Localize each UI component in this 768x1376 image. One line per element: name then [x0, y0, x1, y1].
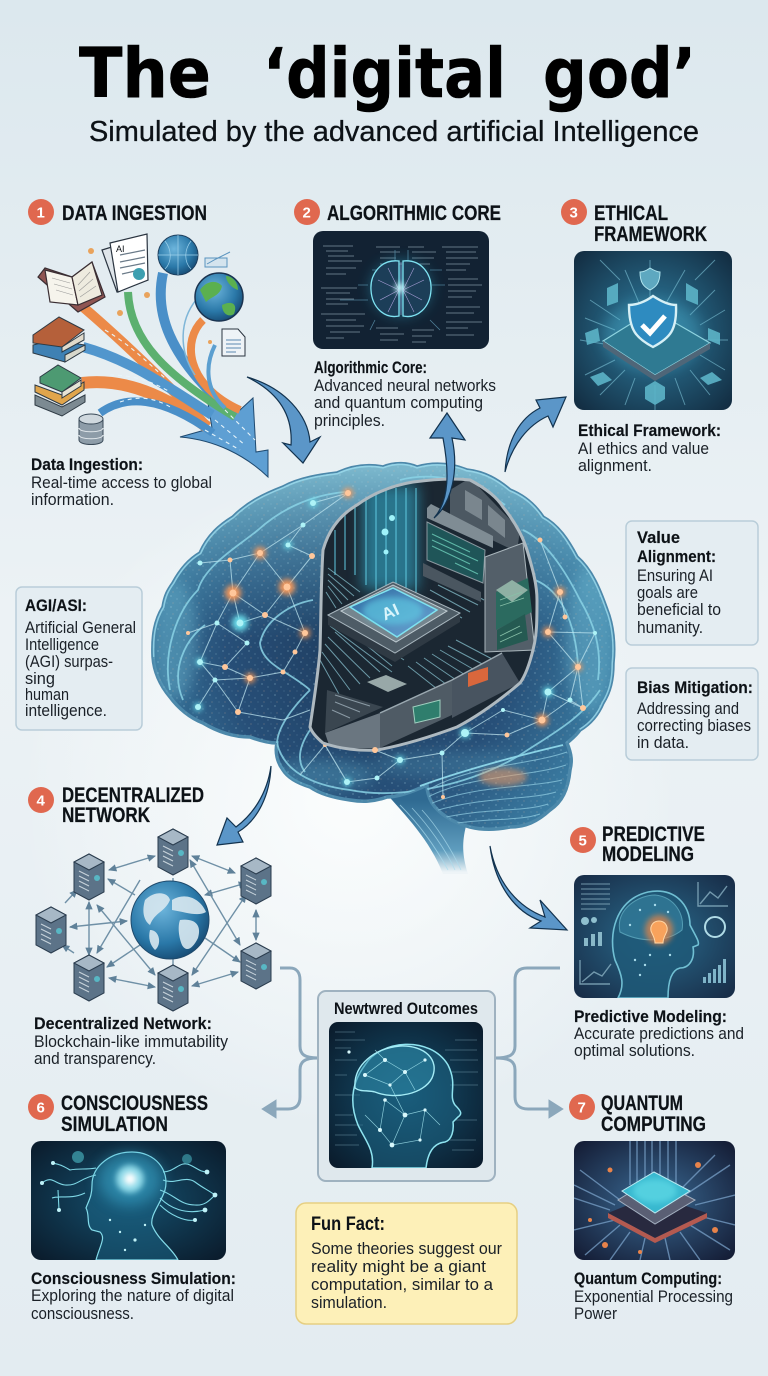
description 1 [31, 455, 212, 509]
callout: fun fact: simulation. [311, 1293, 387, 1312]
panel: AGI/ASI: Intelligence [25, 635, 99, 654]
badge 1: 1 [36, 204, 45, 222]
section 1: data ingestion [28, 199, 268, 509]
section 7: quantum computing [569, 1092, 735, 1323]
neural links [188, 493, 595, 797]
network links [62, 856, 256, 987]
description 4 [34, 1014, 229, 1068]
globe earth [195, 273, 243, 321]
thumbnail: neural code brain [313, 231, 489, 349]
neural nodes glow [225, 488, 582, 726]
description 3: Ethical Framework: [578, 421, 721, 440]
server [241, 858, 271, 904]
heading 3: FRAMEWORK [594, 223, 707, 246]
server [158, 965, 188, 1011]
badge 7 [569, 1094, 595, 1120]
description 6: consciousness. [31, 1304, 134, 1323]
thumbnail: predictive head [574, 875, 735, 998]
AI paper [102, 234, 148, 292]
section 4: decentralized network [28, 784, 271, 1068]
description 7: Quantum Computing: [574, 1269, 722, 1288]
merged arrow [180, 385, 268, 477]
brain outline [153, 464, 614, 829]
badge 4 [28, 787, 54, 813]
heading 5: MODELING [602, 843, 694, 866]
description 5: Predictive Modeling: [574, 1007, 727, 1026]
section 2: algorithmic core [294, 199, 501, 430]
heading 4: NETWORK [62, 804, 150, 827]
panel: AGI/ASI: AGI/ASI: [25, 596, 87, 615]
section 5: predictive modeling [570, 823, 744, 1060]
server [241, 943, 271, 989]
brain upper glow and folds [150, 460, 620, 830]
callout: fun fact [296, 1203, 517, 1324]
server [74, 854, 104, 900]
description 3: alignment. [578, 456, 652, 475]
description 5: optimal solutions. [574, 1041, 695, 1060]
cutaway rim [310, 479, 537, 750]
description 7: Exponential Processing [574, 1287, 733, 1306]
panel: AGI/ASI [16, 587, 142, 730]
brainstem [385, 785, 468, 874]
badge 3: 3 [570, 204, 578, 222]
badge 6: 6 [36, 1100, 45, 1116]
description 7: Power [574, 1304, 617, 1323]
panel: bias mitigation: correcting biases [637, 716, 751, 735]
neural nodes [186, 490, 586, 799]
description 7 [574, 1269, 733, 1323]
circuit traces [320, 568, 494, 696]
callout: fun fact: Some theories suggest our [311, 1239, 502, 1258]
server [158, 829, 188, 875]
panel: value alignment: Ensuring AI [637, 566, 713, 585]
globe blue [158, 235, 198, 275]
badge 5: 5 [578, 832, 587, 850]
arrow: brain to network [217, 766, 271, 845]
panel: value alignment: humanity. [637, 618, 703, 637]
heading 3: ETHICAL [594, 202, 668, 225]
badge 2 [294, 199, 320, 225]
small particles [88, 248, 212, 344]
heading 6: CONSCIOUSNESS [61, 1092, 208, 1115]
callout: fun fact: computation, similar to a [311, 1275, 494, 1294]
title: The [79, 34, 211, 114]
panel: value alignment: Value [637, 528, 680, 547]
title: ‘digital [263, 34, 506, 114]
AI paper: AI [116, 244, 125, 254]
panel: value alignment [626, 521, 758, 645]
panel: AGI/ASI: sing [25, 669, 55, 688]
description 3 [578, 421, 721, 475]
description 6: Consciousness Simulation: [31, 1269, 236, 1288]
description 2 [314, 358, 496, 430]
section 3: ethical framework [561, 199, 732, 475]
badge 3 [561, 199, 587, 225]
server [36, 907, 66, 953]
description 5 [574, 1007, 744, 1060]
document [222, 329, 245, 356]
description 6 [31, 1269, 236, 1323]
thumbnail: shield on chip [574, 251, 732, 410]
subtitle: Simulated by the advanced artificial Intelligence [89, 116, 699, 148]
arrow: data to brain [247, 377, 320, 463]
description 5: Accurate predictions and [574, 1024, 744, 1043]
heading 7: COMPUTING [601, 1113, 706, 1136]
panel: AGI/ASI: human [25, 685, 69, 704]
heading 7 [601, 1092, 706, 1136]
globe [131, 881, 209, 959]
badge 2: 2 [302, 204, 311, 222]
panel: AGI/ASI: (AGI) surpas- [25, 652, 113, 671]
panel: value alignment: goals are [637, 583, 698, 602]
heading 1: DATA INGESTION [62, 202, 207, 225]
description 4: Decentralized Network: [34, 1014, 212, 1033]
description 1: information. [31, 490, 114, 509]
panel: value alignment: beneficial to [637, 600, 721, 619]
panel: AGI/ASI: Artificial General [25, 618, 136, 637]
heading 2: ALGORITHMIC CORE [327, 202, 501, 225]
server [74, 955, 104, 1001]
panel: bias mitigation [626, 668, 758, 760]
description 1: Data Ingestion: [31, 455, 143, 474]
data beam [362, 485, 418, 590]
lower panels [325, 690, 383, 733]
thumbnail: quantum chip [574, 1141, 735, 1260]
heading 5: PREDICTIVE [602, 823, 705, 846]
brain illustration [150, 460, 620, 874]
description 4: Blockchain-like immutability [34, 1032, 229, 1051]
connectors around central panel [264, 968, 561, 1116]
description 1: Real-time access to global [31, 473, 212, 492]
thumbnail: glowing head [329, 1022, 483, 1168]
data streams [82, 273, 255, 450]
heading 3 [594, 202, 707, 246]
cutaway chamber [310, 478, 537, 750]
cerebellum stripes [428, 752, 567, 824]
heading 4: DECENTRALIZED [62, 784, 204, 807]
arrow: brain to ethics [505, 397, 566, 472]
panel: bias mitigation: Addressing and [637, 699, 739, 718]
description 2: and quantum computing [314, 393, 483, 412]
badge 4: 4 [36, 792, 46, 810]
description 2: Advanced neural networks [314, 376, 496, 395]
arrow: brain to predictive [490, 846, 567, 930]
arrow: brain to algorithmic core [430, 413, 465, 518]
panel: bias mitigation: Bias Mitigation: [637, 678, 753, 697]
title [79, 34, 696, 114]
description 6: Exploring the nature of digital [31, 1286, 234, 1305]
shield [629, 296, 676, 347]
callout: fun fact: reality might be a giant [311, 1257, 486, 1276]
description 2: principles. [314, 411, 385, 430]
mini chart [205, 252, 230, 267]
description 2: Algorithmic Core: [314, 358, 427, 377]
green book stack [35, 365, 85, 416]
badge 5 [570, 827, 596, 853]
database [79, 414, 103, 444]
description 4: and transparency. [34, 1049, 156, 1068]
red book stack [33, 317, 85, 362]
section 6: consciousness simulation [28, 1092, 236, 1323]
chip [328, 614, 460, 662]
open book [38, 262, 105, 312]
heading 4 [62, 784, 204, 827]
heading 6: SIMULATION [61, 1113, 168, 1136]
badge 7: 7 [578, 1100, 586, 1116]
callout: fun fact: Fun Fact: [311, 1214, 385, 1235]
panel: value alignment: Alignment: [637, 547, 716, 566]
panel: bias mitigation: in data. [637, 733, 689, 752]
badge 6 [28, 1094, 54, 1120]
panel heading: Newtwred Outcomes [334, 999, 478, 1018]
panel: AGI/ASI: intelligence. [25, 701, 107, 720]
server racks [450, 481, 520, 548]
title: god’ [543, 34, 696, 114]
thumbnail: glowing mind [31, 1141, 226, 1260]
chip label: AI [379, 600, 402, 624]
description 3: AI ethics and value [578, 439, 709, 458]
heading 7: QUANTUM [601, 1092, 683, 1115]
panel: nurtured outcomes [318, 991, 495, 1181]
badge 1 [28, 199, 54, 225]
heading 5 [602, 823, 705, 866]
heading 6 [61, 1092, 208, 1136]
